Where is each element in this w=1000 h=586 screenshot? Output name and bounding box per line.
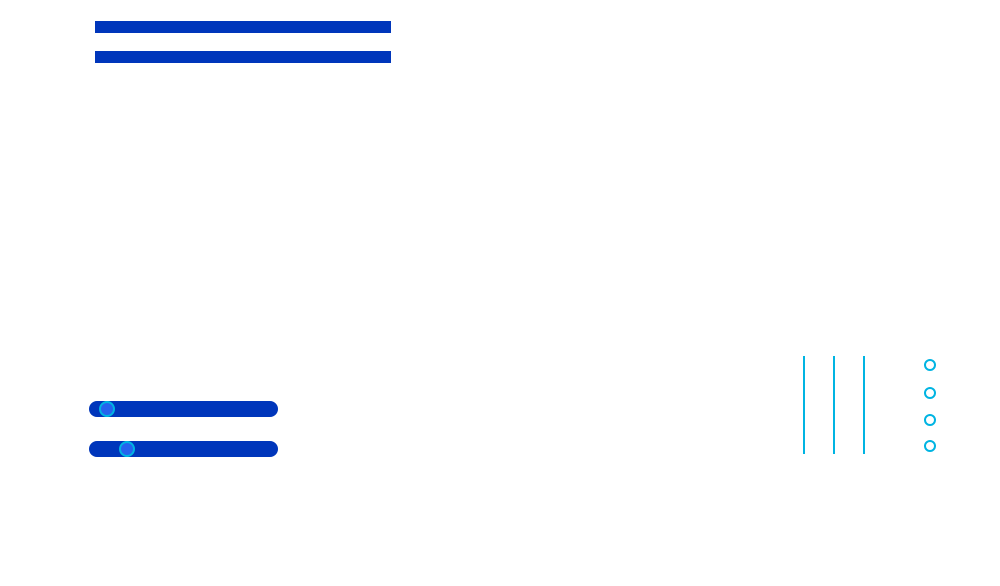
slider 1 knob (100, 402, 114, 416)
ring marker 3 (925, 415, 935, 425)
ring marker 1 (925, 360, 935, 370)
vertical line 2 (833, 356, 835, 454)
vertical lines (803, 356, 865, 454)
slider 2 track (89, 441, 278, 457)
slider 1 (89, 401, 278, 417)
slider 2 (89, 441, 278, 457)
ring marker 2 (925, 388, 935, 398)
slider 2 knob (120, 442, 134, 456)
slider 1 track (89, 401, 278, 417)
header bar 2 (95, 51, 391, 63)
vertical line 3 (863, 356, 865, 454)
header bar 1 (95, 21, 391, 33)
ring marker 4 (925, 441, 935, 451)
ring markers (925, 360, 935, 451)
header bars (95, 21, 391, 63)
vertical line 1 (803, 356, 805, 454)
